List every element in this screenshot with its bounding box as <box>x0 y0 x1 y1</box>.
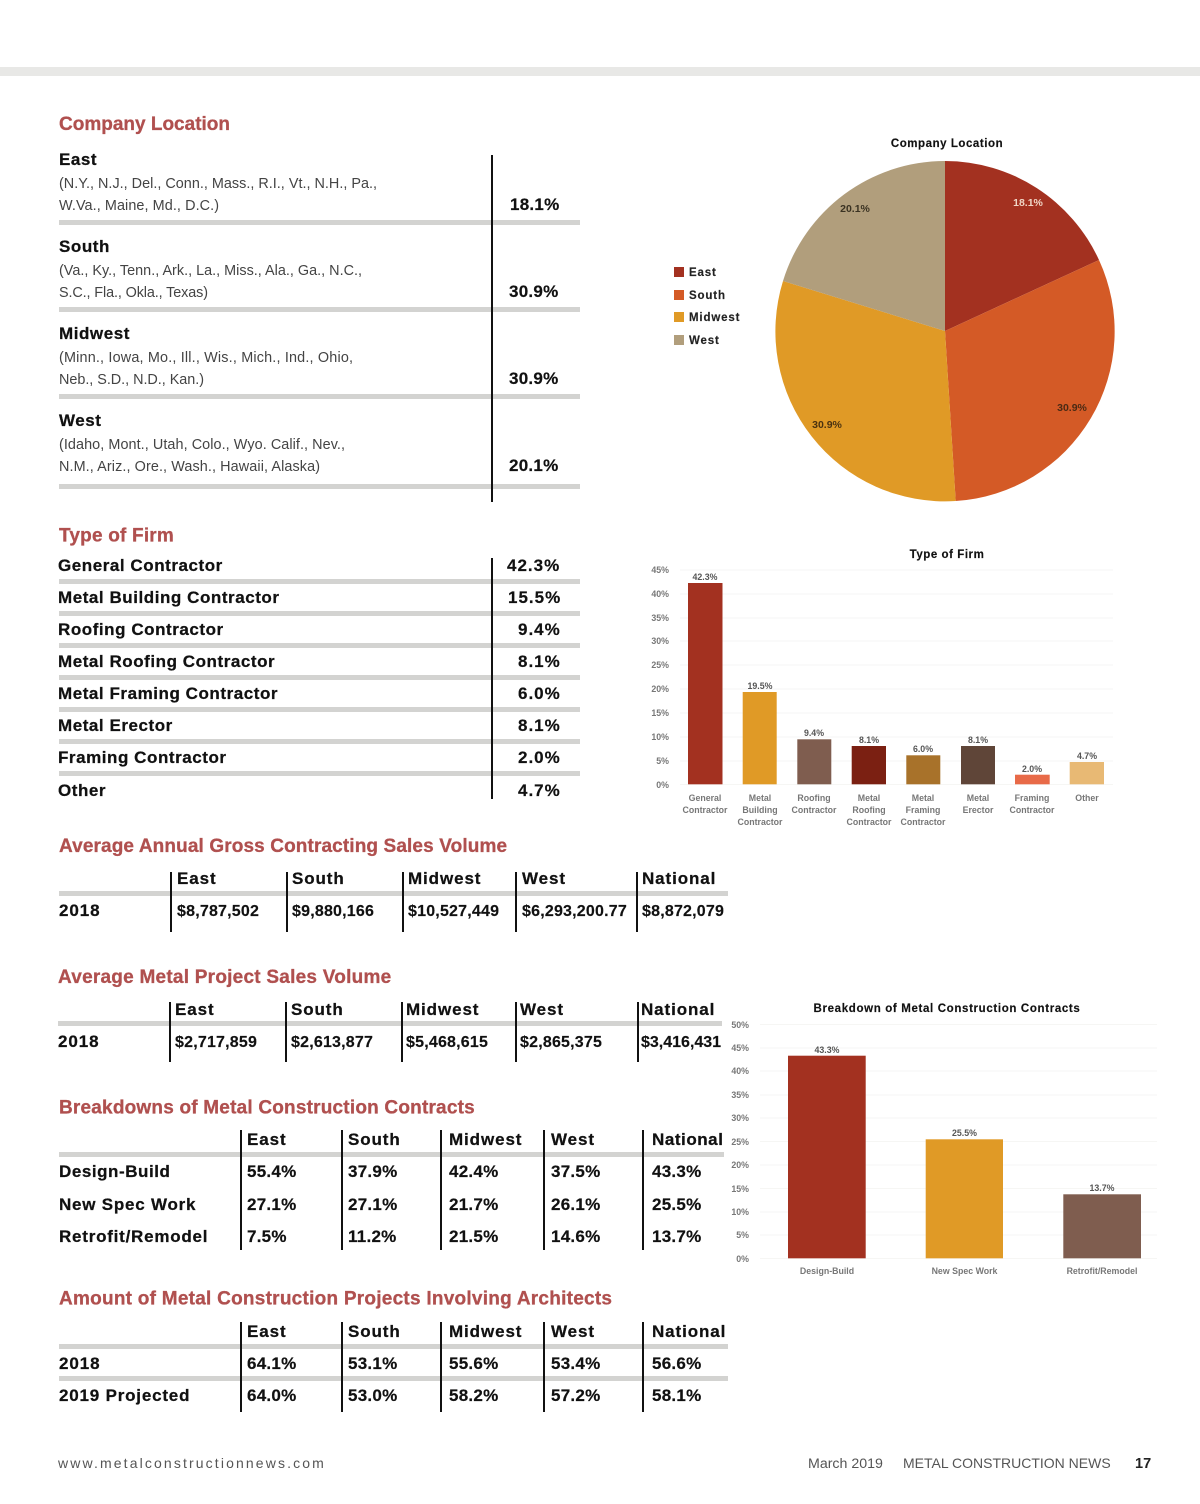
panel: breakdowns of metal construction contracts table: 43.3% <box>652 1162 701 1181</box>
panel: projects involving architects table: East <box>247 1322 287 1341</box>
heading: architects: Amount of Metal Construction Projects Involving Architects <box>59 1288 612 1310</box>
bar chart: type of firm: Other <box>1075 793 1099 803</box>
panel: breakdowns of metal construction contracts table: 27.1% <box>247 1195 296 1214</box>
panel: average annual gross contracting sales volume: 2018 <box>59 901 100 920</box>
row: east: East <box>59 150 97 169</box>
panel: company location table <box>59 114 580 502</box>
bar chart: type of firm: 0% <box>656 780 669 790</box>
panel: average annual gross contracting sales volume: Midwest <box>408 869 481 888</box>
panel: projects involving architects table: National <box>652 1322 726 1341</box>
bar chart: type of firm: 35% <box>651 613 669 623</box>
row: west: West <box>59 411 102 430</box>
bar chart: breakdown of metal construction contracts: 5% <box>736 1230 749 1240</box>
bar chart: type of firm <box>651 549 1113 827</box>
panel: breakdowns of metal construction contracts table: 14.6% <box>551 1227 600 1246</box>
panel: projects involving architects table: 55.6% <box>449 1354 498 1373</box>
panel: average metal project sales volume: 2018 <box>58 1032 99 1051</box>
bar chart: type of firm: 45% <box>651 565 669 575</box>
bar chart: type of firm: Erector <box>963 805 994 815</box>
bar chart: type of firm: 4.7% <box>1077 751 1097 761</box>
panel: projects involving architects table: 2019 Projected <box>59 1386 190 1405</box>
panel: breakdowns of metal construction contracts table: National <box>652 1130 723 1149</box>
panel: breakdowns of metal construction contracts table: 26.1% <box>551 1195 600 1214</box>
footer: March 2019 <box>808 1456 883 1472</box>
bar chart: type of firm: 40% <box>651 589 669 599</box>
footer: METAL CONSTRUCTION NEWS <box>903 1455 1111 1471</box>
bar chart: type of firm: General <box>689 793 721 803</box>
panel: breakdowns of metal construction contracts table: Midwest <box>449 1130 522 1149</box>
panel: average metal project sales volume: $2,865,375 <box>520 1034 602 1051</box>
panel: type of firm table: 42.3% <box>507 556 560 575</box>
bar chart: breakdown of metal construction contracts: Breakdown of Metal Construction Contracts <box>814 1003 1080 1015</box>
bar chart: type of firm: Metal <box>858 793 880 803</box>
panel: average metal project sales volume: $3,416,431 <box>641 1034 721 1051</box>
panel: breakdowns of metal construction contracts table: 21.5% <box>449 1227 498 1246</box>
pie chart: company location: 20.1% <box>840 203 871 215</box>
row: east: 18.1% <box>510 195 559 214</box>
row: south: (Va., Ky., Tenn., Ark., La., Miss., Ala., Ga., N.C., <box>59 263 362 279</box>
bar chart: type of firm: Contractor <box>847 817 892 827</box>
footer <box>57 1455 1151 1472</box>
panel: type of firm table: Roofing Contractor <box>58 620 224 639</box>
row: east <box>59 150 559 214</box>
panel: average metal project sales volume: $5,468,615 <box>406 1034 488 1051</box>
row: south: 30.9% <box>509 282 558 301</box>
panel: breakdowns of metal construction contracts table: 11.2% <box>348 1227 397 1246</box>
panel: projects involving architects table <box>59 1288 728 1412</box>
panel: breakdowns of metal construction contracts table: East <box>247 1130 287 1149</box>
panel: breakdowns of metal construction contracts table: Retrofit/Remodel <box>59 1227 208 1246</box>
panel: average metal project sales volume: $2,717,859 <box>175 1034 257 1051</box>
panel: average annual gross contracting sales volume: $8,787,502 <box>177 903 259 920</box>
panel: type of firm table: General Contractor <box>58 556 223 575</box>
row: midwest: (Minn., Iowa, Mo., Ill., Wis., Mich., Ind., Ohio, <box>59 350 353 366</box>
panel: average metal project sales volume <box>58 967 722 1062</box>
bar chart: breakdown of metal construction contracts: 25% <box>731 1137 749 1147</box>
heading: breakdowns: Breakdowns of Metal Construction Contracts <box>59 1098 475 1118</box>
footer: www.metalconstructionnews.com <box>57 1455 326 1471</box>
panel: average annual gross contracting sales volume: $9,880,166 <box>292 903 374 920</box>
bar chart: type of firm: 6.0% <box>913 744 933 754</box>
bar chart: breakdown of metal construction contracts: 15% <box>731 1184 749 1194</box>
heading: metal project sales volume: Average Metal Project Sales Volume <box>58 967 391 988</box>
panel: average metal project sales volume: South <box>291 1000 344 1019</box>
bar chart: type of firm: Roofing <box>797 793 831 803</box>
panel: projects involving architects table: 56.6% <box>652 1354 701 1373</box>
panel: type of firm table: 6.0% <box>518 684 561 703</box>
legend: company location: East <box>689 267 717 279</box>
bar chart: breakdown of metal construction contracts: 13.7% <box>1090 1183 1115 1193</box>
panel: breakdowns of metal construction contracts table: 7.5% <box>247 1227 287 1246</box>
pie chart: company location: Company Location <box>891 138 1003 150</box>
bar chart: breakdown of metal construction contracts: 50% <box>731 1020 749 1030</box>
panel: breakdowns of metal construction contracts table: New Spec Work <box>59 1195 196 1214</box>
bar chart: breakdown of metal construction contracts: 20% <box>731 1160 749 1170</box>
bar chart: type of firm: 8.1% <box>968 735 988 745</box>
panel: breakdowns of metal construction contracts table: 55.4% <box>247 1162 296 1181</box>
bar chart: breakdown of metal construction contracts: 40% <box>731 1066 749 1076</box>
row: midwest: Neb., S.D., N.D., Kan.) <box>59 372 204 388</box>
panel: average metal project sales volume: West <box>520 1000 564 1019</box>
bar chart: type of firm: Metal <box>912 793 934 803</box>
panel: breakdowns of metal construction contracts table: 37.9% <box>348 1162 397 1181</box>
panel: breakdowns of metal construction contracts table: 27.1% <box>348 1195 397 1214</box>
bar chart: breakdown of metal construction contracts: 10% <box>731 1207 749 1217</box>
pie chart: company location: 30.9% <box>812 419 843 431</box>
panel: type of firm table: Metal Building Contractor <box>58 588 280 607</box>
panel: type of firm table: 9.4% <box>518 620 561 639</box>
row: west: 20.1% <box>509 456 558 475</box>
panel: projects involving architects table: 53.1% <box>348 1354 397 1373</box>
panel: average annual gross contracting sales volume: $6,293,200.77 <box>522 903 627 920</box>
panel: breakdowns of metal construction contracts table <box>59 1098 724 1250</box>
panel: projects involving architects table: West <box>551 1322 595 1341</box>
bar chart: type of firm: Type of Firm <box>910 549 984 561</box>
panel: average metal project sales volume: East <box>175 1000 215 1019</box>
row: west: (Idaho, Mont., Utah, Colo., Wyo. Calif., Nev., <box>59 437 345 453</box>
panel: projects involving architects table: 53.4% <box>551 1354 600 1373</box>
panel: type of firm table: Metal Framing Contractor <box>58 684 278 703</box>
panel: average annual gross contracting sales volume: West <box>522 869 566 888</box>
row: west <box>59 411 558 475</box>
bar chart: breakdown of metal construction contracts: 35% <box>731 1090 749 1100</box>
legend: company location: Midwest <box>689 312 740 324</box>
panel: type of firm table: Metal Roofing Contractor <box>58 652 275 671</box>
panel: projects involving architects table: 2018 <box>59 1354 100 1373</box>
bar chart: breakdown of metal construction contracts: 45% <box>731 1043 749 1053</box>
bar chart: type of firm: 8.1% <box>859 735 879 745</box>
bar chart: type of firm: 15% <box>651 708 669 718</box>
panel: projects involving architects table: 64.0% <box>247 1386 296 1405</box>
panel: breakdowns of metal construction contracts table: 25.5% <box>652 1195 701 1214</box>
panel: projects involving architects table: Midwest <box>449 1322 522 1341</box>
bar chart: type of firm: 2.0% <box>1022 764 1042 774</box>
footer: 17 <box>1135 1456 1151 1472</box>
panel: average annual gross contracting sales volume: National <box>642 869 716 888</box>
panel: projects involving architects table: 57.2% <box>551 1386 600 1405</box>
panel: breakdowns of metal construction contracts table: 37.5% <box>551 1162 600 1181</box>
bar chart: breakdown of metal construction contracts: 30% <box>731 1113 749 1123</box>
panel: type of firm table <box>58 526 580 800</box>
bar chart: breakdown of metal construction contracts: 0% <box>736 1254 749 1264</box>
panel: type of firm table: 4.7% <box>518 781 561 800</box>
bar chart: type of firm: 5% <box>656 756 669 766</box>
row: east: (N.Y., N.J., Del., Conn., Mass., R.I., Vt., N.H., Pa., <box>59 176 377 192</box>
bar chart: type of firm: 19.5% <box>748 681 773 691</box>
bar chart: type of firm: Contractor <box>738 817 783 827</box>
bar chart: type of firm: Roofing <box>852 805 886 815</box>
row: south <box>59 237 558 301</box>
heading: type of firm: Type of Firm <box>59 526 174 546</box>
panel: type of firm table: 8.1% <box>518 716 561 735</box>
panel: average annual gross contracting sales volume: South <box>292 869 345 888</box>
heading: gross sales volume: Average Annual Gross Contracting Sales Volume <box>59 836 507 857</box>
panel: type of firm table: 8.1% <box>518 652 561 671</box>
panel: projects involving architects table: South <box>348 1322 401 1341</box>
bar chart: type of firm: 20% <box>651 684 669 694</box>
row: midwest: Midwest <box>59 324 130 343</box>
panel: average metal project sales volume: National <box>641 1000 715 1019</box>
panel: breakdowns of metal construction contracts table: 21.7% <box>449 1195 498 1214</box>
row: west: N.M., Ariz., Ore., Wash., Hawaii, Alaska) <box>59 459 320 475</box>
row: south: S.C., Fla., Okla., Texas) <box>59 285 208 301</box>
bar chart: type of firm: Contractor <box>901 817 946 827</box>
bar chart: type of firm: 30% <box>651 636 669 646</box>
row: east: W.Va., Maine, Md., D.C.) <box>59 198 219 214</box>
panel: type of firm table: Metal Erector <box>58 716 173 735</box>
panel: type of firm table: Framing Contractor <box>58 748 227 767</box>
bar chart: breakdown of metal construction contracts: 25.5% <box>952 1128 977 1138</box>
bar chart: breakdown of metal construction contracts: 43.3% <box>815 1045 840 1055</box>
bar chart: breakdown of metal construction contracts: New Spec Work <box>932 1266 998 1276</box>
bar chart: type of firm: 9.4% <box>804 728 824 738</box>
panel: type of firm table: 15.5% <box>508 588 561 607</box>
bar chart: type of firm: Contractor <box>1010 805 1055 815</box>
panel: average metal project sales volume: $2,613,877 <box>291 1034 373 1051</box>
bar chart: type of firm: Metal <box>967 793 989 803</box>
panel: projects involving architects table: 58.2% <box>449 1386 498 1405</box>
panel: projects involving architects table: 53.0% <box>348 1386 397 1405</box>
panel: breakdowns of metal construction contracts table: Design-Build <box>59 1162 170 1181</box>
legend: company location <box>674 267 740 347</box>
panel: breakdowns of metal construction contracts table: 13.7% <box>652 1227 701 1246</box>
panel: average annual gross contracting sales volume <box>59 836 728 932</box>
row: midwest <box>59 324 558 388</box>
bar chart: type of firm: 42.3% <box>693 572 718 582</box>
bar chart: type of firm: Contractor <box>792 805 837 815</box>
panel: type of firm table: 2.0% <box>518 748 561 767</box>
panel: breakdowns of metal construction contracts table: West <box>551 1130 595 1149</box>
panel: average metal project sales volume: Midwest <box>406 1000 479 1019</box>
panel: projects involving architects table: 64.1% <box>247 1354 296 1373</box>
row: midwest: 30.9% <box>509 369 558 388</box>
bar chart: type of firm: 25% <box>651 660 669 670</box>
legend: company location: South <box>689 290 726 302</box>
bar chart: breakdown of metal construction contracts: Retrofit/Remodel <box>1067 1266 1137 1276</box>
pie chart: company location: 30.9% <box>1057 402 1088 414</box>
bar chart: type of firm: Metal <box>749 793 771 803</box>
bar chart: breakdown of metal construction contracts <box>731 1003 1157 1276</box>
panel: average annual gross contracting sales volume: $8,872,079 <box>642 903 724 920</box>
pie chart: company location <box>775 138 1115 501</box>
panel: type of firm table: Other <box>58 781 106 800</box>
panel: breakdowns of metal construction contracts table: 42.4% <box>449 1162 498 1181</box>
pie chart: company location: 18.1% <box>1013 197 1044 209</box>
panel: average annual gross contracting sales volume: $10,527,449 <box>408 903 499 920</box>
panel: breakdowns of metal construction contracts table: South <box>348 1130 401 1149</box>
bar chart: type of firm: Contractor <box>683 805 728 815</box>
bar chart: type of firm: Building <box>742 805 778 815</box>
legend: company location: West <box>689 335 720 347</box>
bar chart: breakdown of metal construction contracts: Design-Build <box>800 1266 854 1276</box>
bar chart: type of firm: Framing <box>1015 793 1049 803</box>
heading: company location: Company Location <box>59 114 230 135</box>
bar chart: type of firm: Framing <box>906 805 940 815</box>
row: south: South <box>59 237 110 256</box>
panel: average annual gross contracting sales volume: East <box>177 869 217 888</box>
bar chart: type of firm: 10% <box>651 732 669 742</box>
panel: projects involving architects table: 58.1% <box>652 1386 701 1405</box>
